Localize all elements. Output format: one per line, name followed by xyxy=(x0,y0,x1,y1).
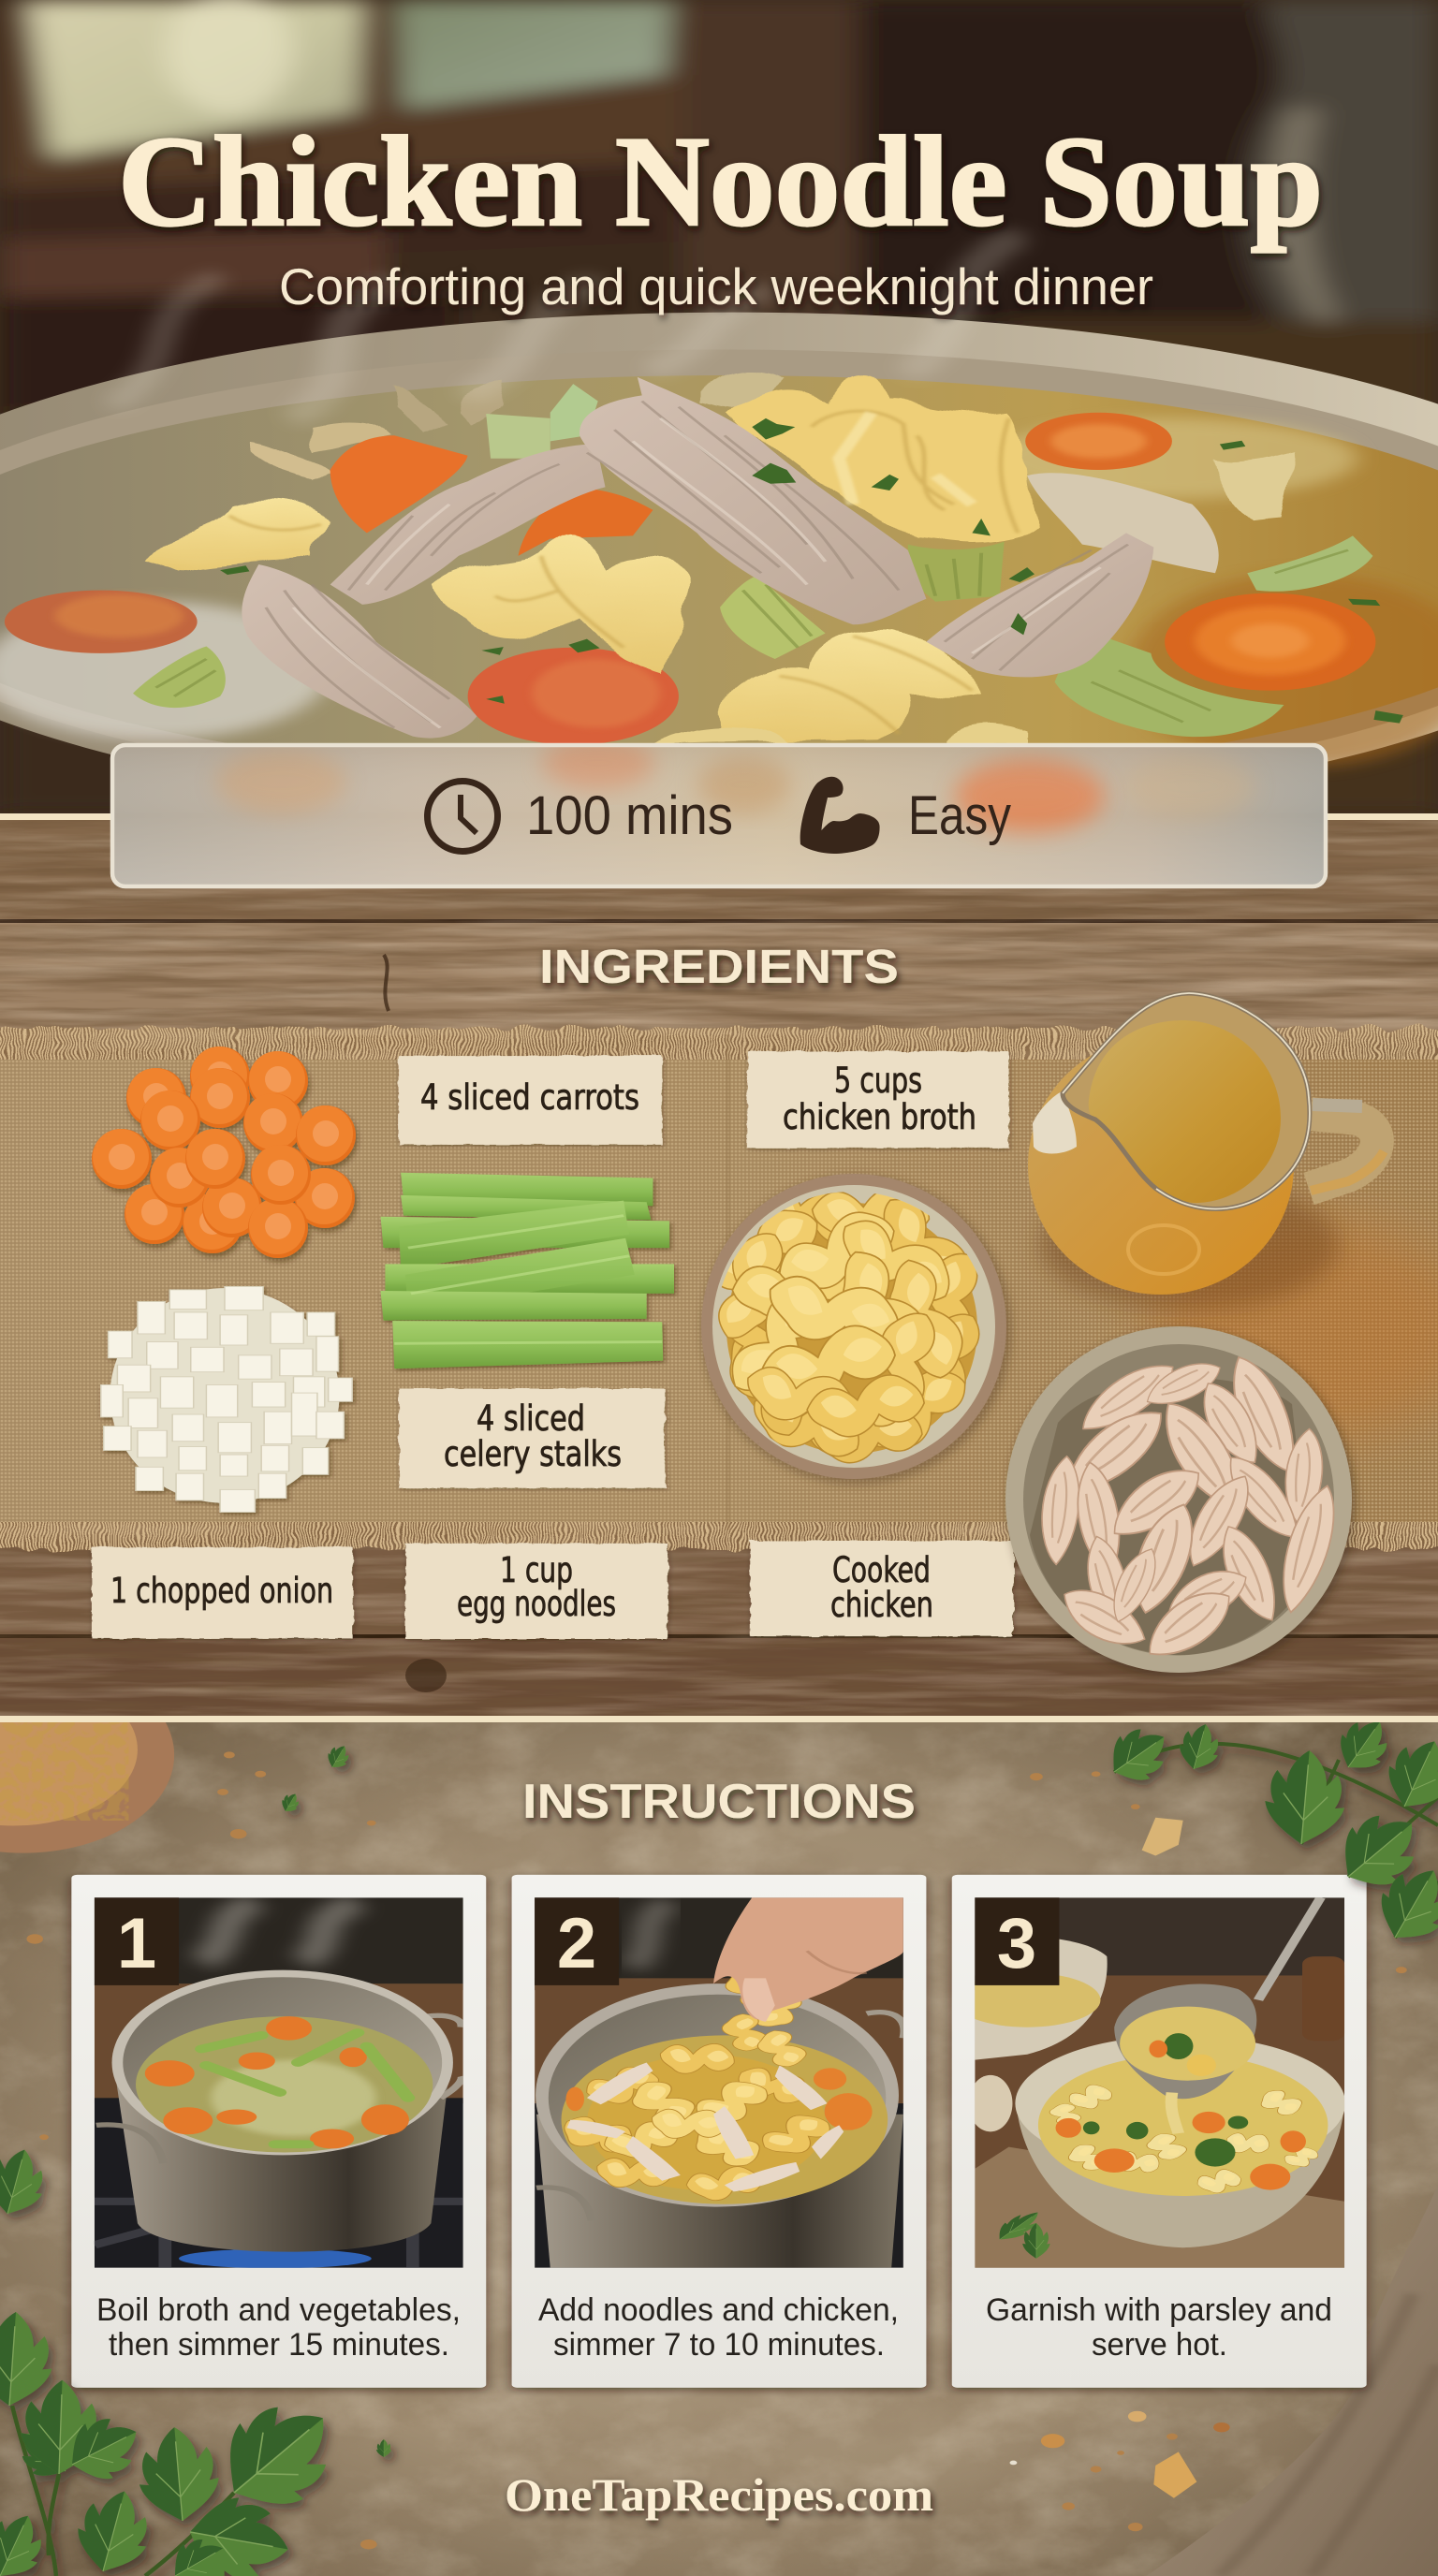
frosted glass panel xyxy=(110,737,1328,888)
step 1 text xyxy=(96,2292,461,2363)
subtitle: Comforting and quick weeknight dinner xyxy=(279,257,1153,315)
background: rustic kitchen wall and window xyxy=(0,0,1438,814)
panel: ingredients xyxy=(0,820,1438,1716)
heading: ingredients: INGREDIENTS xyxy=(539,940,899,993)
step 3 text: serve hot. xyxy=(1092,2327,1227,2363)
stats bar xyxy=(110,737,1328,888)
ingredient label cards (torn paper) xyxy=(92,1051,1013,1639)
shredded chicken xyxy=(242,377,1219,739)
time text: 100 mins xyxy=(526,785,733,846)
step numbers: 3 xyxy=(997,1904,1036,1983)
panel: instructions xyxy=(0,1657,1438,2576)
ingredient: carrots xyxy=(92,1046,356,1258)
stone background xyxy=(0,1722,1438,2576)
ingredient: chopped onion xyxy=(101,1286,352,1513)
difficulty text: Easy xyxy=(908,785,1011,846)
icon: flexed arm xyxy=(800,777,880,854)
noodles back xyxy=(246,371,1293,521)
step 3 text: Garnish with parsley and xyxy=(986,2292,1332,2328)
ingredient label text: 1 chopped onion xyxy=(110,1571,333,1611)
step 1 text: Boil broth and vegetables, xyxy=(96,2292,461,2328)
bowl inner wall xyxy=(0,350,1438,743)
ingredient label text: Cooked xyxy=(832,1550,931,1590)
ingredient: jug of chicken broth xyxy=(1028,993,1384,1310)
ingredient label text xyxy=(110,1061,976,1625)
card background xyxy=(512,1875,926,2388)
decoration: bowl of crumbs xyxy=(0,1657,174,1853)
egg noodles front xyxy=(147,375,1036,745)
celery pieces xyxy=(133,384,1372,737)
ingredient label text: 1 cup xyxy=(500,1550,573,1590)
decoration: parsley bottom left xyxy=(0,1741,391,2576)
photo: ladling soup xyxy=(954,1897,1345,2268)
carrot slices xyxy=(5,413,1375,745)
step numbers: 2 xyxy=(557,1904,596,1983)
ingredient label text: 5 cups xyxy=(834,1061,922,1101)
step 2 text: simmer 7 to 10 minutes. xyxy=(553,2327,885,2363)
step 3 text xyxy=(986,2292,1332,2363)
steam xyxy=(119,241,1009,413)
soup broth xyxy=(0,375,1438,783)
ingredient: bowl of egg noodles xyxy=(701,1173,1011,1485)
footer brand: OneTapRecipes.com xyxy=(505,2468,933,2521)
burlap cloth xyxy=(0,1028,1438,1550)
photo: adding noodles xyxy=(535,1897,904,2268)
card background xyxy=(952,1875,1367,2388)
wood table xyxy=(0,820,1438,1716)
step numbers: 1 xyxy=(117,1904,156,1983)
card 3 xyxy=(952,1875,1367,2388)
ingredient label text: celery stalks xyxy=(444,1434,622,1474)
divider: cream line above wood xyxy=(0,813,1438,820)
parsley flecks xyxy=(220,418,1403,724)
title: Chicken Noodle Soup xyxy=(118,110,1323,253)
ingredient: bowl of shredded chicken xyxy=(1005,1326,1356,1677)
decoration: crumbs xyxy=(26,1751,1407,2549)
divider: cream line above instructions xyxy=(0,1716,1438,1722)
card background xyxy=(71,1875,486,2388)
panel: hero photo xyxy=(0,0,1438,823)
ingredient label text: 4 sliced carrots xyxy=(420,1077,639,1118)
ingredient label text: chicken xyxy=(830,1585,933,1625)
step numbers xyxy=(117,1904,1036,1983)
heading: instructions: INSTRUCTIONS xyxy=(522,1775,916,1829)
step 2 text: Add noodles and chicken, xyxy=(538,2292,899,2328)
step badge 1 xyxy=(95,1897,179,1985)
bowl rim xyxy=(0,313,1438,762)
card 1 xyxy=(71,1875,486,2388)
ingredient label text: 4 sliced xyxy=(477,1398,585,1439)
card 2 xyxy=(512,1875,926,2388)
step badge 3 xyxy=(975,1897,1059,1985)
decoration: parsley top right xyxy=(1099,1708,1438,1954)
decoration: linen cloth xyxy=(1146,2185,1438,2576)
noodle pile xyxy=(702,1173,993,1470)
photo: pot on stove xyxy=(95,1897,463,2268)
icon: clock xyxy=(427,781,498,852)
step 1 text: then simmer 15 minutes. xyxy=(109,2327,449,2363)
step 2 text xyxy=(538,2292,899,2363)
ingredient: celery sticks xyxy=(381,1173,674,1368)
ingredient label text: egg noodles xyxy=(457,1584,616,1624)
step badge 2 xyxy=(535,1897,619,1985)
ingredient label text: chicken broth xyxy=(783,1097,976,1137)
